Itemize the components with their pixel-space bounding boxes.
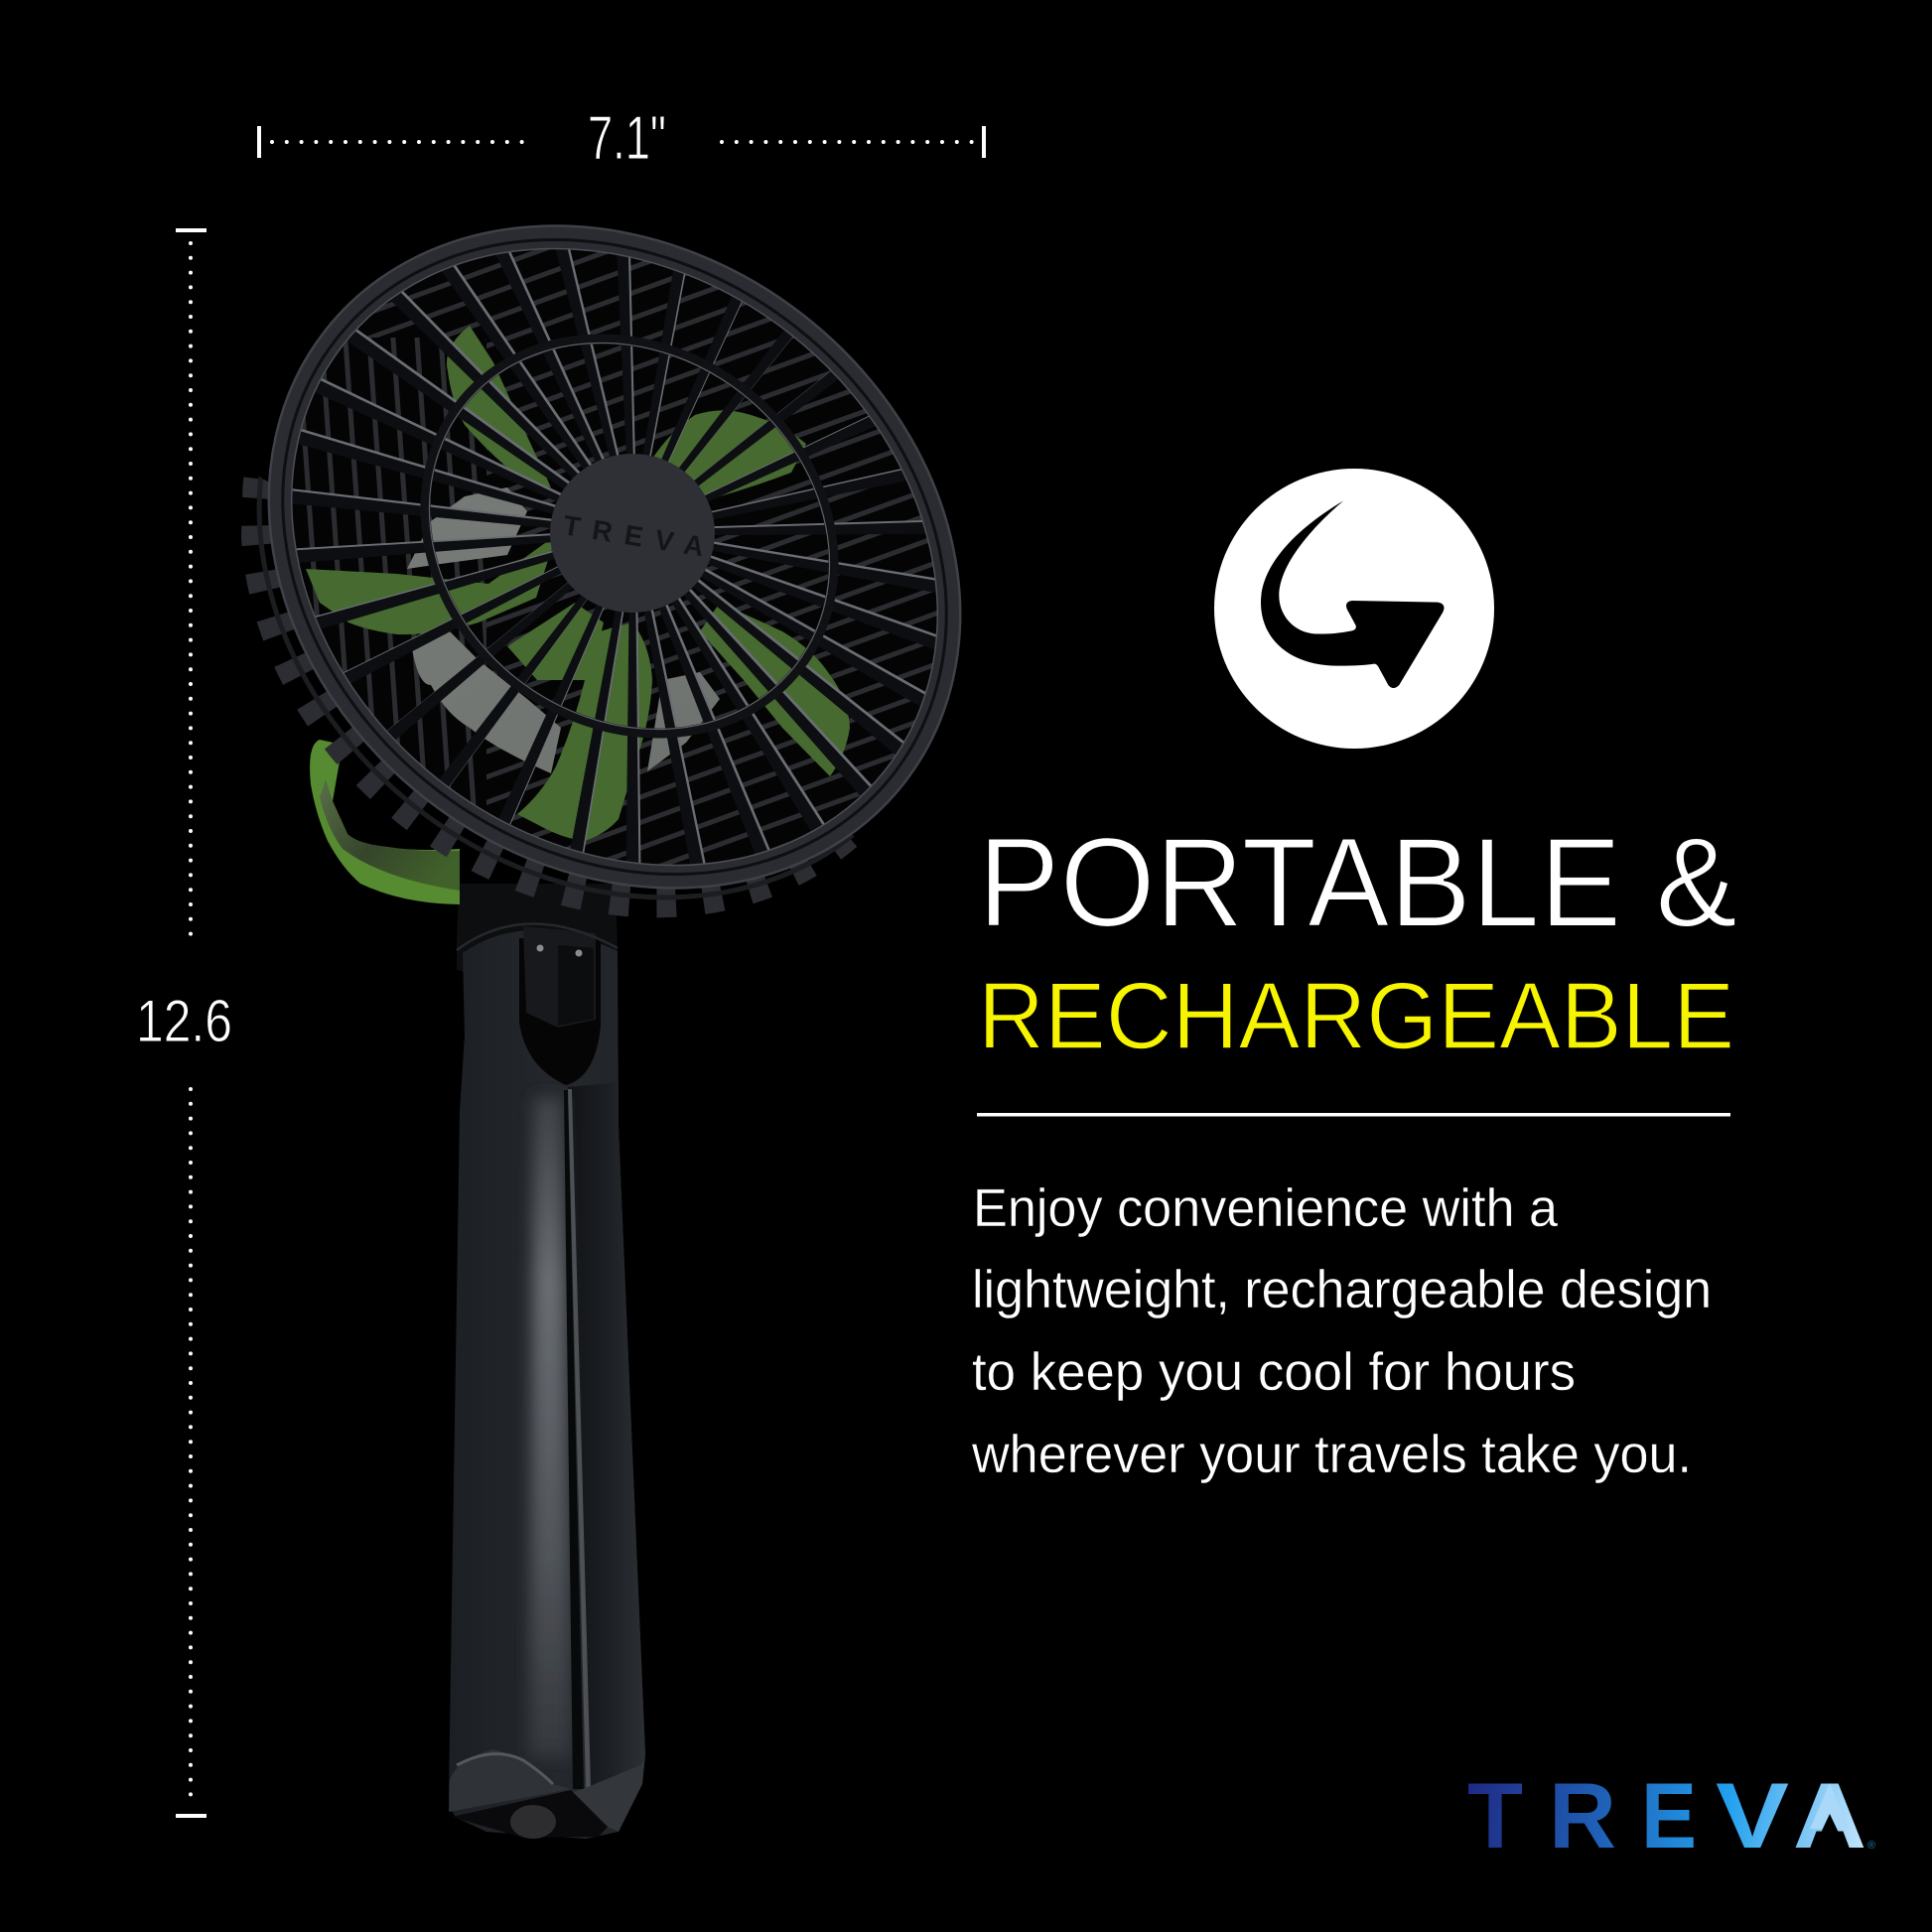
hub disc [550, 454, 715, 613]
interior base [150, 103, 1079, 1011]
handle body [449, 930, 645, 1839]
brand logo [1467, 1763, 1875, 1867]
width label: 7.1" [588, 104, 666, 173]
handle seam [564, 1089, 591, 1789]
collar edge highlight [457, 923, 618, 950]
right panel shading [568, 1082, 645, 1790]
rear housing fins [241, 477, 858, 917]
grille spokes [292, 250, 936, 864]
handle highlight [529, 1097, 572, 1757]
clip button [523, 926, 596, 1028]
right dotted line [722, 140, 973, 144]
logo wordmark: E [1641, 1763, 1697, 1867]
lower dotted line [189, 1089, 193, 1805]
heading divider [977, 1113, 1730, 1116]
body text: lightweight, rechargeable design [972, 1260, 1712, 1319]
right end cap [573, 1754, 645, 1832]
heading [978, 812, 1737, 1069]
handle collar [457, 884, 618, 978]
upper dotted line [189, 243, 193, 948]
fan outer rim [136, 89, 1093, 1025]
height dimension: 12.6 inches [136, 228, 232, 1818]
heading line 2: RECHARGEABLE [978, 963, 1734, 1069]
logo wordmark: T [1467, 1763, 1523, 1867]
left end tick [257, 126, 261, 158]
product photo: handheld fan [127, 89, 1093, 1839]
green hanging strap [310, 740, 460, 904]
logo A counter [1813, 1814, 1847, 1850]
body text: to keep you cool for hours [972, 1342, 1576, 1402]
rear grille left [302, 338, 486, 805]
logo wordmark: A [1793, 1763, 1866, 1867]
fan blades [306, 326, 850, 841]
fan interior [292, 249, 937, 865]
icon: curved arrow in white circle [1214, 469, 1494, 749]
top end tick [176, 228, 207, 232]
base foot [452, 1790, 608, 1839]
end cap highlight [457, 1754, 553, 1784]
body text: wherever your travels take you. [971, 1425, 1692, 1484]
logo A apex fill [1810, 1783, 1850, 1829]
left dotted line [272, 140, 523, 144]
width dimension: 7.1 inches [257, 104, 986, 173]
fan hub with logo [550, 454, 715, 613]
clip recess [519, 938, 601, 1085]
grille inner ring [346, 258, 912, 814]
logo wordmark: V [1716, 1763, 1789, 1867]
right end tick [982, 126, 986, 158]
logo wordmark: R [1549, 1763, 1616, 1867]
registered mark: ® [1867, 1840, 1875, 1852]
body text [971, 1178, 1712, 1484]
body text: Enjoy convenience with a [973, 1178, 1559, 1238]
hub logo: TREVA [561, 509, 706, 562]
height label: 12.6 [136, 988, 232, 1054]
left end cap [449, 1749, 571, 1812]
logo wordmark [1467, 1763, 1866, 1867]
fan handle [449, 884, 645, 1839]
rear grille right [367, 249, 937, 865]
bottom end tick [176, 1814, 207, 1818]
motor and light panels [407, 487, 720, 773]
strap outer band [310, 740, 460, 904]
strap inner face [320, 779, 460, 891]
heading line 1: PORTABLE & [978, 812, 1737, 954]
